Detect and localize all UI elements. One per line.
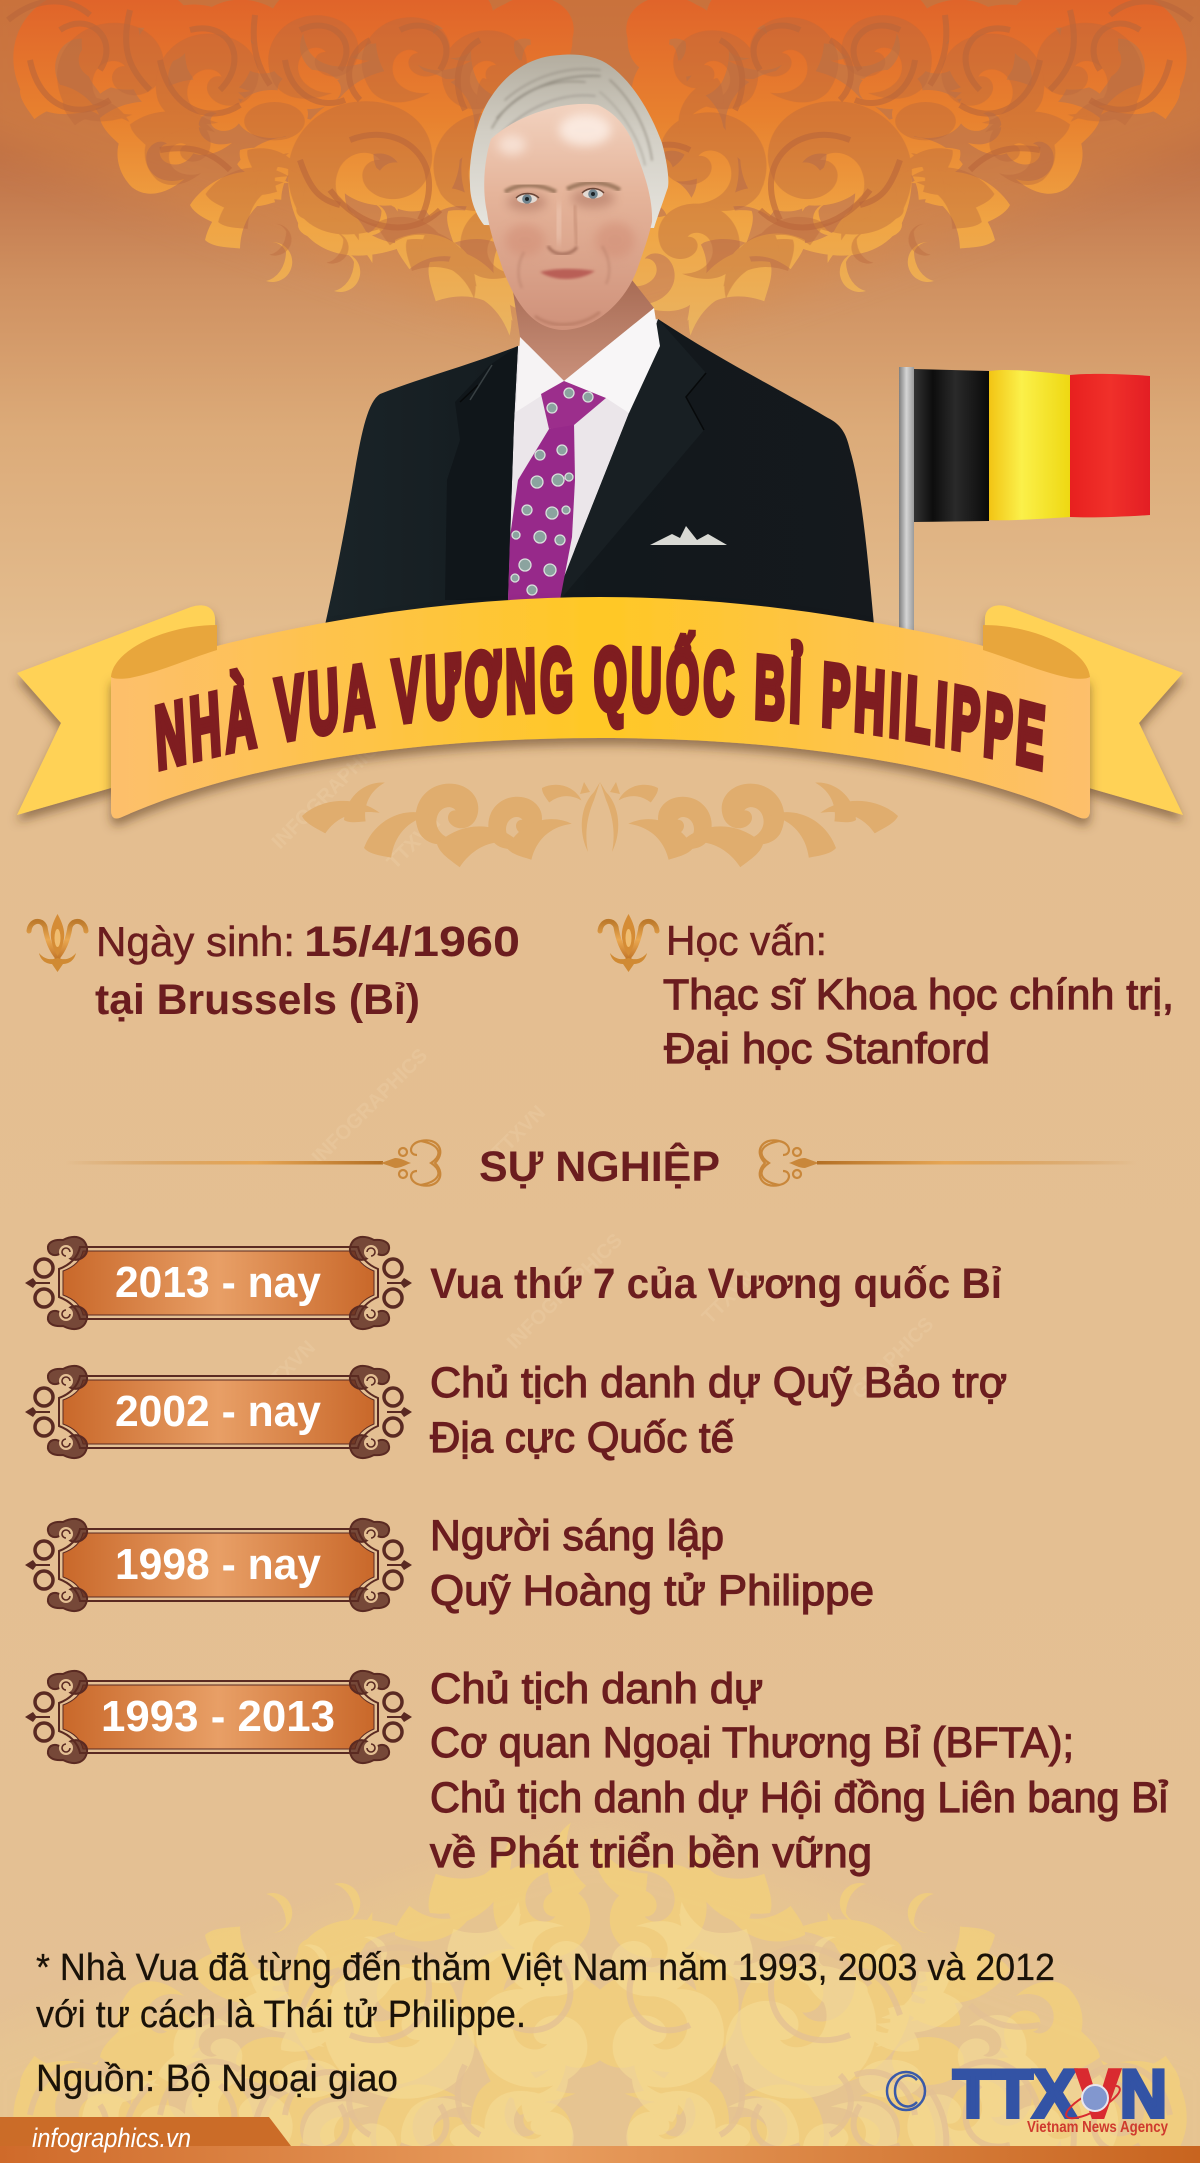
year plate (25, 1366, 412, 1458)
career row 1993: Chủ tịch danh dự (430, 1665, 763, 1713)
pocket square (650, 526, 727, 545)
career row 1998 (25, 1512, 874, 1615)
watermarks: TTXVN (383, 812, 445, 874)
neck (512, 280, 654, 381)
bottom bar (0, 2146, 1200, 2163)
birth info: 15/4/1960 (304, 918, 520, 966)
career row 2002: Chủ tịch danh dự Quỹ Bảo trợ (430, 1359, 1007, 1407)
website tab: infographics.vn (32, 2123, 191, 2153)
top floral ornament (0, 0, 1200, 380)
birth info: tại Brussels (Bỉ) (95, 976, 420, 1024)
icon: copyright (887, 2072, 925, 2110)
watermarks: GRAPHICS (848, 1313, 938, 1404)
red stripe (1070, 374, 1150, 517)
hair strands (492, 69, 652, 165)
bottom floral ornament (0, 1820, 1200, 2163)
year plate: 1993 - 2013 (101, 1692, 335, 1741)
watermarks (258, 730, 938, 1404)
career row 1998: Quỹ Hoàng tử Philippe (430, 1567, 874, 1615)
education info: Học vấn: (666, 917, 827, 964)
year plate: 2013 - nay (115, 1258, 322, 1307)
career heading (65, 1140, 1136, 1191)
career heading: SỰ NGHIỆP (479, 1142, 720, 1191)
year plate: 2002 - nay (115, 1387, 322, 1436)
pole (899, 367, 914, 632)
career row 2013 (25, 1237, 1002, 1329)
career row 1993 (25, 1665, 1168, 1877)
year plate (25, 1671, 412, 1763)
collar (516, 308, 660, 413)
ribbon body (111, 597, 1090, 818)
career row 1993: Chủ tịch danh dự Hội đồng Liên bang Bỉ (430, 1774, 1168, 1822)
watermarks: INFOGRAPHICS (503, 1230, 627, 1354)
portrait of King Philippe (325, 54, 874, 625)
ornament under ribbon (300, 776, 900, 878)
birth info: Ngày sinh: (96, 918, 295, 965)
website tab (0, 2117, 291, 2153)
career row 1993: Cơ quan Ngoại Thương Bỉ (BFTA); (430, 1719, 1074, 1767)
face (484, 104, 652, 330)
watermarks: TTXVN (488, 1102, 550, 1164)
footnote: với tư cách là Thái tử Philippe. (36, 1994, 526, 2036)
watermarks: INFOGRAPHICS (268, 730, 392, 854)
year plate (25, 1237, 412, 1329)
career row 2002 (25, 1359, 1007, 1462)
tie (508, 381, 606, 600)
ribbon tails (17, 605, 1183, 815)
yellow stripe (989, 370, 1070, 520)
icon: gold trident (29, 914, 86, 972)
watermarks: TTXVN (258, 1337, 320, 1399)
icon: gold trident (600, 914, 657, 972)
education info: Thạc sĩ Khoa học chính trị, (663, 971, 1174, 1019)
TTXVN logo: Vietnam News Agency (1027, 2119, 1168, 2136)
footnote (36, 1947, 1055, 2036)
career row 2002: Địa cực Quốc tế (430, 1414, 734, 1462)
education info: Đại học Stanford (664, 1025, 990, 1073)
globe (1062, 2080, 1124, 2124)
TTXVN logo: TTXVN (953, 2056, 1167, 2132)
year plate: 1998 - nay (115, 1540, 322, 1589)
career row 1998: Người sáng lập (430, 1512, 724, 1560)
Belgian flag (899, 367, 1150, 632)
career row 1993: về Phát triển bền vững (430, 1829, 872, 1877)
birth info (29, 914, 520, 1024)
career row 2013: Vua thứ 7 của Vương quốc Bỉ (430, 1260, 1002, 1308)
year plate (25, 1519, 412, 1611)
ribbon folds (111, 625, 1090, 679)
education info (600, 914, 1174, 1073)
black stripe (914, 369, 989, 522)
watermarks: INFOGRAPHICS (308, 1045, 432, 1169)
title ribbon (14, 597, 1186, 832)
shirt (508, 319, 658, 600)
title: NHÀ VUA VƯƠNG QUỐC BỈ PHILIPPE (154, 630, 1046, 772)
footnote: * Nhà Vua đã từng đến thăm Việt Nam năm 1993, 2003 và 2012 (36, 1947, 1055, 1989)
suit lapels (445, 319, 706, 600)
hair (470, 54, 668, 228)
source: Nguồn: Bộ Ngoại giao (36, 2058, 398, 2100)
suit (325, 319, 874, 625)
facial features (498, 114, 635, 325)
watermarks: TTXVN (698, 1267, 760, 1329)
